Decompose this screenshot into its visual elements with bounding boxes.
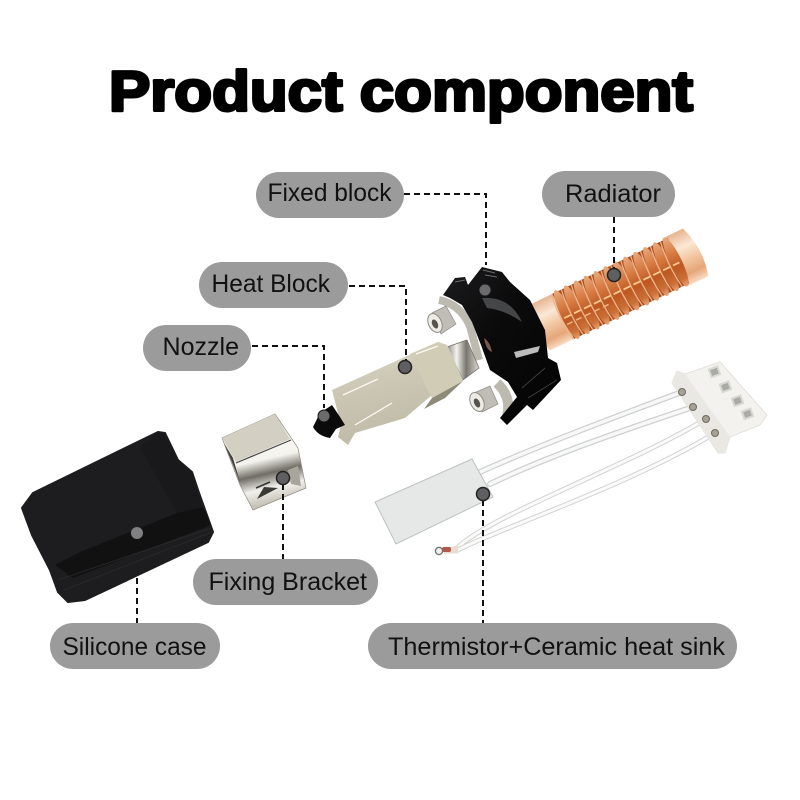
connector: Silicone case: [136, 578, 138, 623]
label: Fixing Bracket: Fixing Bracket: [208, 568, 367, 596]
marker: Thermistor: [476, 488, 490, 500]
label: Thermistor+Ceramic heat sink: [368, 623, 737, 669]
central shaft: [447, 340, 479, 380]
connector: Fixing Bracket: [282, 484, 284, 559]
radiator cap: [662, 226, 711, 287]
marker: Radiator: [608, 268, 620, 282]
label: Fixed block: Fixed block: [268, 179, 392, 207]
marker: Nozzle: [318, 410, 330, 422]
label: Heat Block: [199, 262, 348, 308]
marker: Fixing Bracket: [276, 472, 290, 484]
label: Thermistor+Ceramic heat sink: Thermistor+Ceramic heat sink: [388, 633, 725, 661]
thermistor bead: [435, 545, 458, 555]
radiator fins: [549, 235, 693, 342]
connector: Fixed block: [404, 194, 486, 265]
radiator: [526, 226, 711, 353]
label: Radiator: [542, 171, 675, 217]
wires: thermistor and ceramic leads: [456, 392, 715, 551]
connector: Nozzle: [252, 346, 324, 408]
radiator base: [527, 291, 580, 351]
label: Heat Block: Heat Block: [212, 270, 330, 298]
connector: Heat Block: [349, 286, 406, 360]
marker: Silicone case: [131, 527, 143, 539]
screw: upper: [425, 306, 456, 335]
marker: Heat Block: [398, 360, 412, 374]
silver mounting plate arc: [439, 300, 479, 360]
label: Radiator: Radiator: [565, 180, 661, 208]
connector: Thermistor: [482, 500, 484, 623]
screw: lower: [467, 386, 498, 414]
label: Nozzle: [143, 325, 251, 371]
fixed block black ring: [443, 267, 561, 425]
label: Fixed block: [256, 172, 404, 218]
connector: [672, 362, 767, 453]
marker: Fixed block: [479, 284, 491, 296]
label: Silicone case: [50, 623, 220, 669]
ceramic heat sink plate: [375, 459, 493, 544]
silver lower washer: [497, 383, 508, 416]
silicone case: [22, 432, 213, 602]
nozzle: [313, 405, 345, 438]
label: Fixing Bracket: [193, 559, 378, 605]
label: Silicone case: Silicone case: [62, 633, 206, 661]
title: Product component: [109, 60, 693, 124]
connector: Radiator: [613, 217, 615, 270]
fixing bracket: [222, 414, 306, 510]
label: Nozzle: Nozzle: [162, 333, 239, 361]
heat block: [332, 342, 463, 445]
